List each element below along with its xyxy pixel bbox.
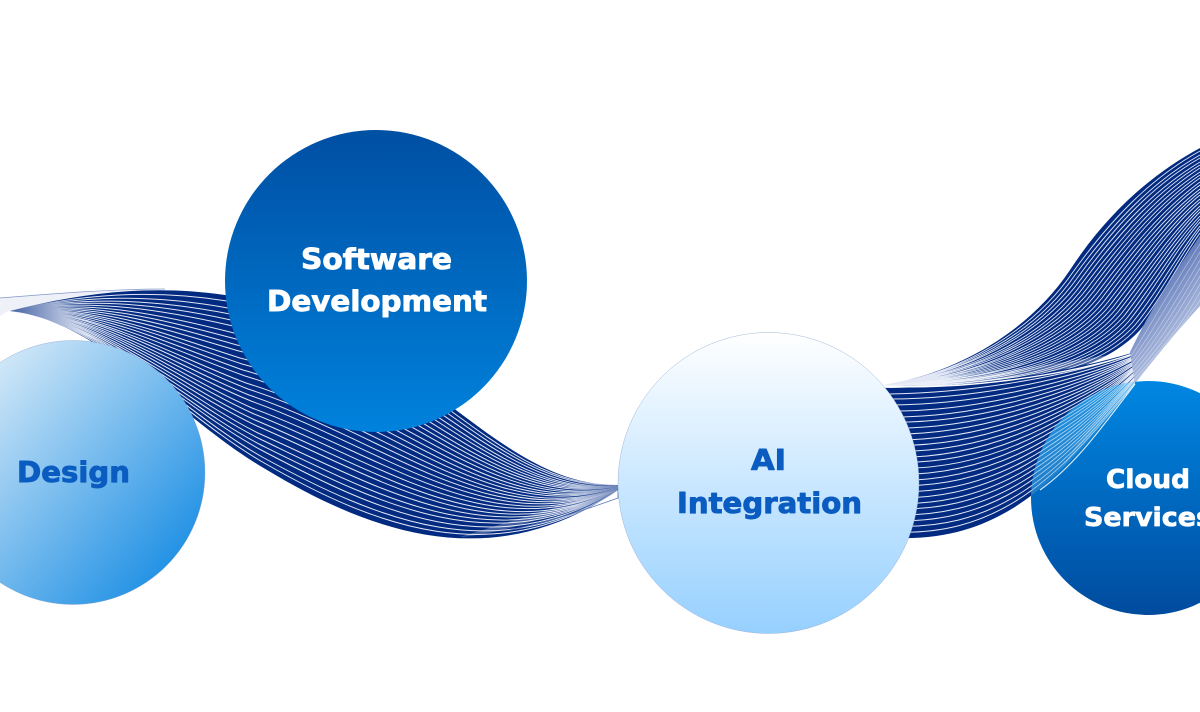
right ribbon wave	[880, 148, 1200, 538]
label: Cloud Services: Cloud	[1106, 465, 1190, 495]
label: AI Integration: Integration	[677, 487, 862, 520]
circle: AI Integration	[618, 332, 919, 634]
circle: Design	[0, 340, 205, 604]
label: Software Development: Development	[267, 285, 487, 318]
circle: Software Development	[225, 130, 527, 432]
label: Design: Design	[17, 456, 130, 489]
label: Software Development: Software	[301, 243, 452, 276]
circle: Cloud Services	[1031, 381, 1200, 615]
ribbon overlay on circle	[1031, 382, 1136, 496]
label: AI Integration: AI	[751, 444, 786, 477]
infographic canvas	[0, 130, 1200, 634]
left ribbon wave	[0, 289, 618, 538]
